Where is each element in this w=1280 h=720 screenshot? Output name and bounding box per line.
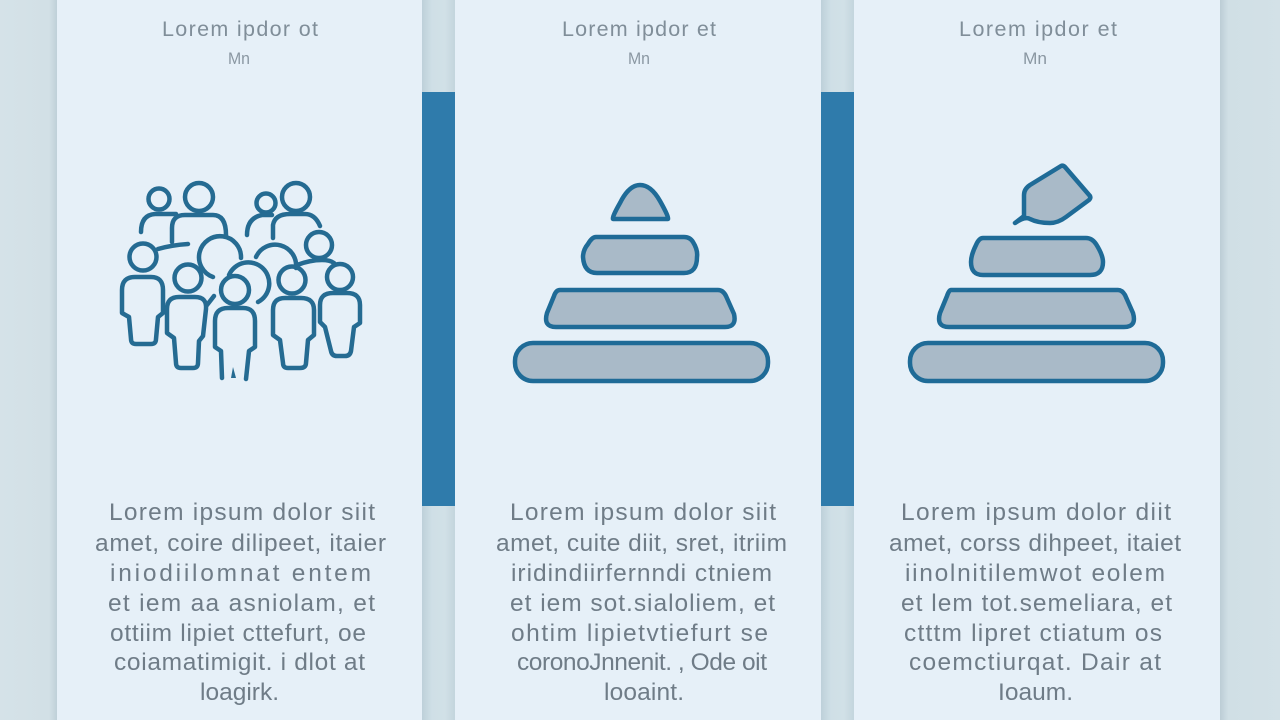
gutter between panels 1 and 2 <box>422 0 455 720</box>
body text: panel 3: Lorem ipsum dolor diit <box>901 499 1171 526</box>
panel: pyramid <box>455 0 821 720</box>
body text: panel 3: iinolnitilemwot eolem <box>905 560 1165 587</box>
body text: panel 1: coiamatimigit. i dlot at <box>114 649 365 676</box>
body text: panel 3 <box>889 499 1181 706</box>
body text: panel 3: amet, corss dihpeet, itaiet <box>889 530 1181 557</box>
body text: panel 1: Lorem ipsum dolor siit <box>109 499 375 526</box>
body text: panel 2: iridindiirfernndi ctniem <box>511 560 772 587</box>
body text: panel 2: amet, cuite diit, sret, itriim <box>496 530 787 557</box>
body text: panel 3: et lem tot.semeliara, et <box>901 590 1172 617</box>
body text: panel 1: iniodiilomnat entem <box>110 560 371 587</box>
body text: panel 3: ctttm lipret ctiatum os <box>904 620 1162 647</box>
body text: panel 2: looaint. <box>604 679 684 706</box>
blue accent band left <box>422 92 455 506</box>
body text: panel 3: coemctiurqat. Dair at <box>909 649 1161 676</box>
body text: panel 1: loagirk. <box>200 679 279 706</box>
background left margin <box>0 0 57 720</box>
icon: pyramid with tilted top <box>910 166 1163 381</box>
body text: panel 1: et iem aa asniolam, et <box>108 590 375 617</box>
icon: pyramid <box>515 185 768 381</box>
subheading: panel 2: Mn <box>628 49 650 68</box>
body text: panel 2: et iem sot.sialoliem, et <box>510 590 775 617</box>
subheading: panel 1: Mn <box>228 49 250 68</box>
body text: panel 3: Ioaum. <box>998 679 1073 706</box>
body text: panel 2: coronoJnnenit. , Ode oit <box>517 649 767 676</box>
body text: panel 2 <box>496 499 787 706</box>
gutter between panels 2 and 3 <box>821 0 854 720</box>
panel: people <box>57 0 422 720</box>
body text: panel 2: ohtim lipietvtiefurt se <box>511 620 768 647</box>
heading: panel 2: Lorem ipdor et <box>562 17 716 41</box>
background right margin <box>1220 0 1280 720</box>
panel: pyramid with tilted cap <box>854 0 1220 720</box>
body text: panel 1: amet, coire dilipeet, itaier <box>95 530 386 557</box>
heading: panel 1: Lorem ipdor ot <box>162 17 318 41</box>
body text: panel 1 <box>95 499 386 706</box>
icon: crowd of people <box>122 183 360 379</box>
heading: panel 3: Lorem ipdor et <box>959 17 1117 41</box>
blue accent band right <box>821 92 855 506</box>
body text: panel 2: Lorem ipsum dolor siit <box>510 499 776 526</box>
subheading: panel 3: Mn <box>1023 49 1047 68</box>
body text: panel 1: ottiim lipiet cttefurt, oe <box>110 620 366 647</box>
